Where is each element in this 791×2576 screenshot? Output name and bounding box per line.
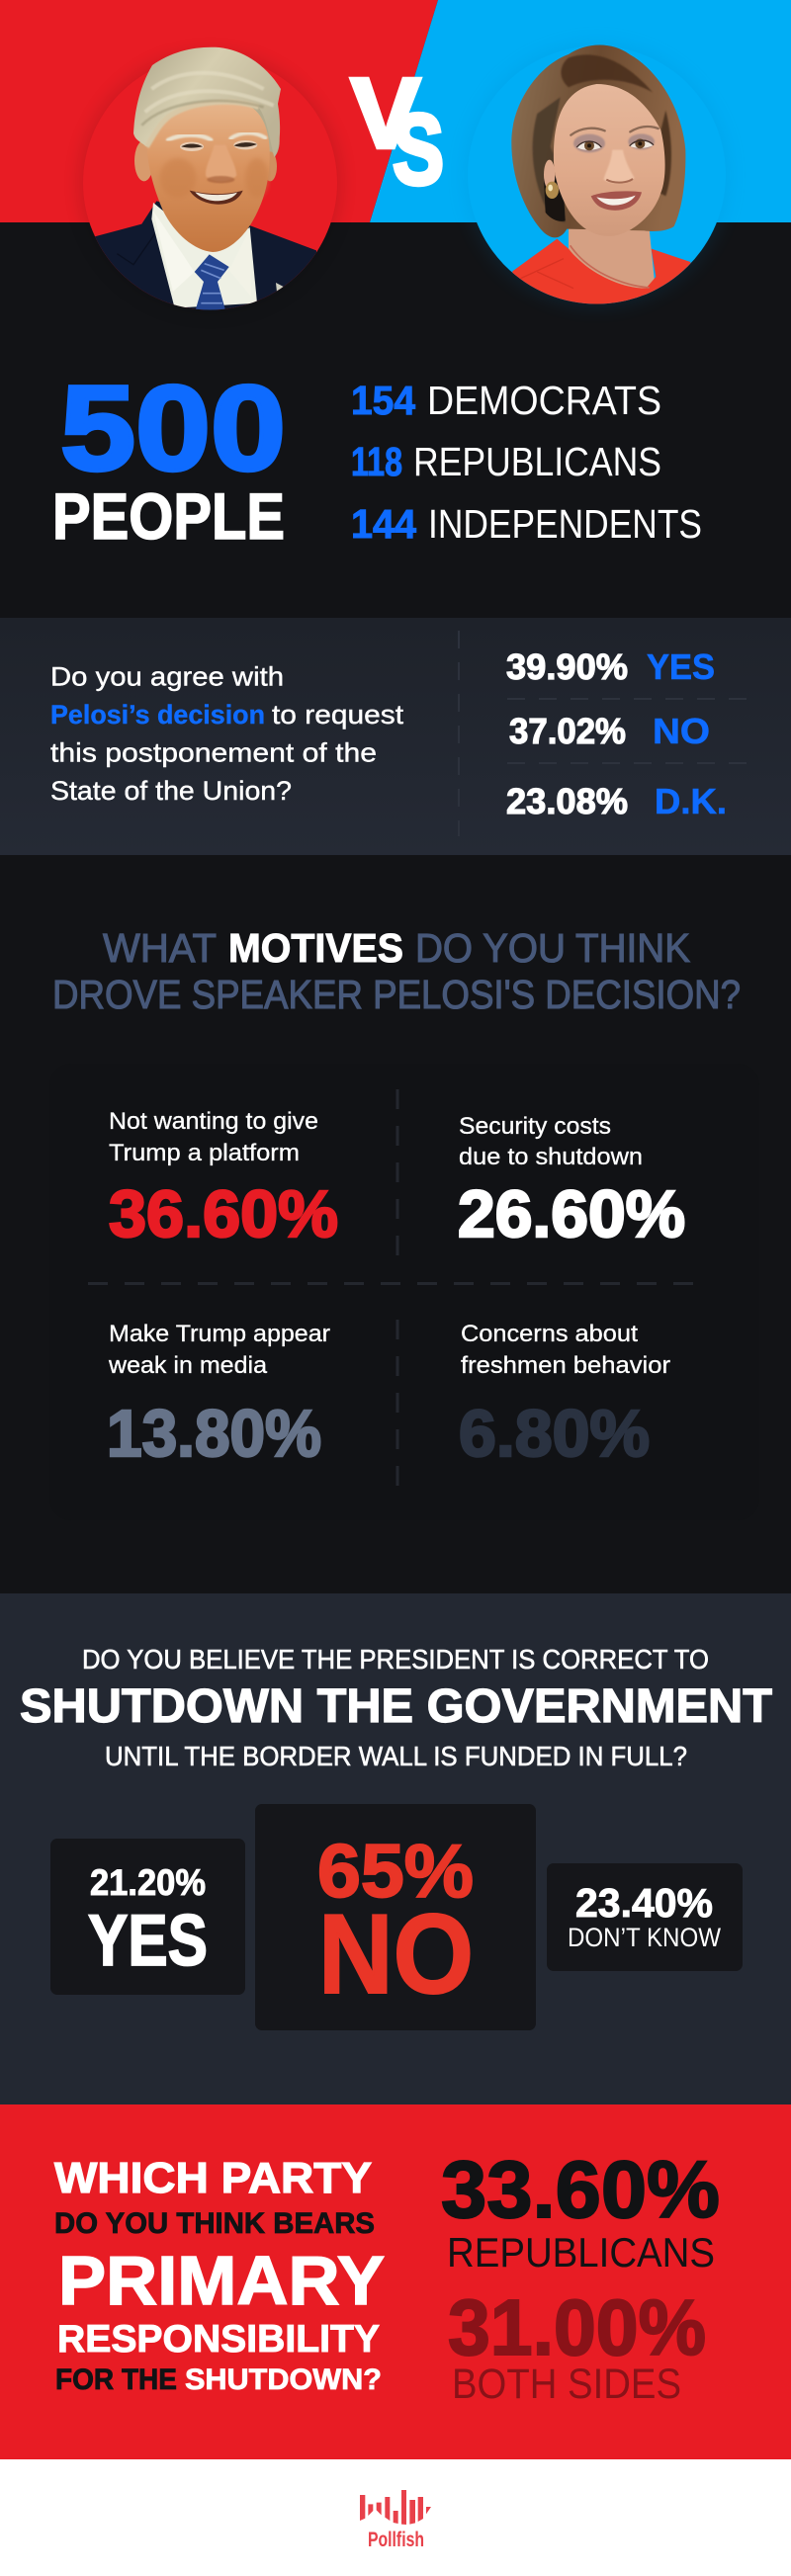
panel: shutdown question bbox=[0, 1593, 791, 2104]
motive: security costs: 26.60% bbox=[458, 1177, 685, 1251]
question text bbox=[50, 662, 404, 806]
motive: security costs bbox=[458, 1113, 685, 1251]
stat: both sides: 31.00% bbox=[448, 2283, 706, 2371]
question text: SHUTDOWN? bbox=[185, 2363, 382, 2396]
card: don't know: DON’T KNOW bbox=[568, 1923, 721, 1952]
VS mark: S bbox=[393, 95, 444, 206]
red half bbox=[0, 0, 438, 222]
heading: motives: WHAT bbox=[103, 925, 217, 971]
heading: motives: MOTIVES bbox=[228, 925, 403, 971]
answer: yes: 39.90% bbox=[506, 646, 628, 687]
motive: appear weak bbox=[107, 1321, 330, 1471]
motive: security costs: due to shutdown bbox=[459, 1144, 643, 1170]
motive: appear weak: Make Trump appear bbox=[109, 1321, 330, 1347]
question text: RESPONSIBILITY bbox=[57, 2318, 380, 2361]
question text bbox=[54, 2154, 385, 2396]
question text: State of the Union? bbox=[50, 776, 292, 806]
card: don't know bbox=[547, 1863, 743, 1971]
answer: no bbox=[509, 711, 710, 751]
question text: PRIMARY bbox=[58, 2242, 385, 2319]
motive: freshmen behavior bbox=[459, 1321, 670, 1471]
breakdown: party counts: 154 bbox=[351, 378, 415, 423]
question text: this postponement of the bbox=[50, 737, 377, 767]
breakdown: party counts: 118 bbox=[351, 439, 402, 484]
motive: freshmen behavior: Concerns about bbox=[461, 1321, 638, 1347]
answer: yes: YES bbox=[647, 646, 715, 687]
panel: footer bbox=[0, 2459, 791, 2576]
question text: WHICH PARTY bbox=[54, 2154, 372, 2202]
card: no: 65% bbox=[317, 1830, 474, 1914]
panel: header versus bbox=[0, 0, 791, 316]
breakdown: party counts bbox=[351, 378, 702, 547]
VS mark: V bbox=[351, 58, 420, 169]
answer: don't know: 23.08% bbox=[506, 781, 628, 821]
VS mark bbox=[351, 58, 444, 206]
answer: no: 37.02% bbox=[509, 711, 626, 751]
card: yes bbox=[50, 1839, 245, 1995]
panel: Pelosi decision question bbox=[0, 618, 791, 855]
answer: yes bbox=[506, 646, 715, 687]
logo: Pollfish: Pollfish bbox=[368, 2529, 424, 2551]
breakdown: party counts: DEMOCRATS bbox=[427, 378, 661, 423]
motive: appear weak: 13.80% bbox=[107, 1397, 321, 1471]
question heading: SHUTDOWN THE GOVERNMENT bbox=[20, 1680, 772, 1733]
card: no bbox=[255, 1804, 536, 2030]
portrait: Donald Trump bbox=[79, 47, 340, 316]
answer: don't know bbox=[506, 781, 727, 821]
stat: 500 people: 500 bbox=[60, 361, 286, 495]
logo: Pollfish bbox=[360, 2490, 431, 2551]
breakdown: party counts: INDEPENDENTS bbox=[428, 501, 702, 547]
stat: both sides bbox=[448, 2283, 706, 2408]
breakdown: party counts: REPUBLICANS bbox=[413, 439, 661, 484]
question text: FOR THE bbox=[55, 2363, 177, 2396]
answer: don't know: D.K. bbox=[655, 781, 727, 821]
panel: sample size bbox=[52, 361, 702, 553]
question heading: UNTIL THE BORDER WALL IS FUNDED IN FULL? bbox=[105, 1741, 687, 1771]
question heading: DO YOU BELIEVE THE PRESIDENT IS CORRECT TO bbox=[82, 1644, 709, 1674]
heading: motives bbox=[52, 925, 741, 1017]
answer: no: NO bbox=[653, 711, 710, 751]
breakdown: party counts: 144 bbox=[351, 501, 416, 547]
stat: republicans: 33.60% bbox=[441, 2145, 720, 2235]
stat: 500 people: PEOPLE bbox=[52, 479, 285, 553]
card: don't know: 23.40% bbox=[575, 1880, 713, 1926]
motive: no platform: Trump a platform bbox=[109, 1140, 300, 1166]
blue half bbox=[370, 0, 791, 222]
stat: both sides: BOTH SIDES bbox=[452, 2361, 681, 2408]
motive: no platform: Not wanting to give bbox=[109, 1108, 318, 1135]
panel: party responsibility bbox=[0, 2104, 791, 2459]
portrait: Nancy Pelosi bbox=[465, 43, 730, 311]
motive: security costs: Security costs bbox=[459, 1113, 611, 1140]
question text: Do you agree with bbox=[50, 662, 284, 692]
question text: to request bbox=[272, 700, 404, 730]
motive: freshmen behavior: 6.80% bbox=[459, 1397, 650, 1471]
panel: motives grid bbox=[49, 1064, 759, 1520]
card: yes: 21.20% bbox=[90, 1862, 206, 1903]
motive: no platform: 36.60% bbox=[109, 1177, 338, 1251]
card: no: NO bbox=[318, 1892, 474, 2018]
motive: appear weak: weak in media bbox=[108, 1352, 268, 1379]
motive: no platform bbox=[109, 1108, 338, 1251]
stat: republicans bbox=[441, 2145, 720, 2275]
heading: motives: DO YOU THINK bbox=[415, 925, 690, 971]
question text: Pelosi’s decision bbox=[50, 700, 265, 730]
stat: republicans: REPUBLICANS bbox=[447, 2229, 715, 2275]
stat: 500 people bbox=[52, 361, 286, 553]
card: yes: YES bbox=[88, 1901, 208, 1981]
question text: DO YOU THINK BEARS bbox=[54, 2207, 375, 2240]
motive: freshmen behavior: freshmen behavior bbox=[461, 1352, 670, 1379]
question heading bbox=[20, 1644, 772, 1771]
